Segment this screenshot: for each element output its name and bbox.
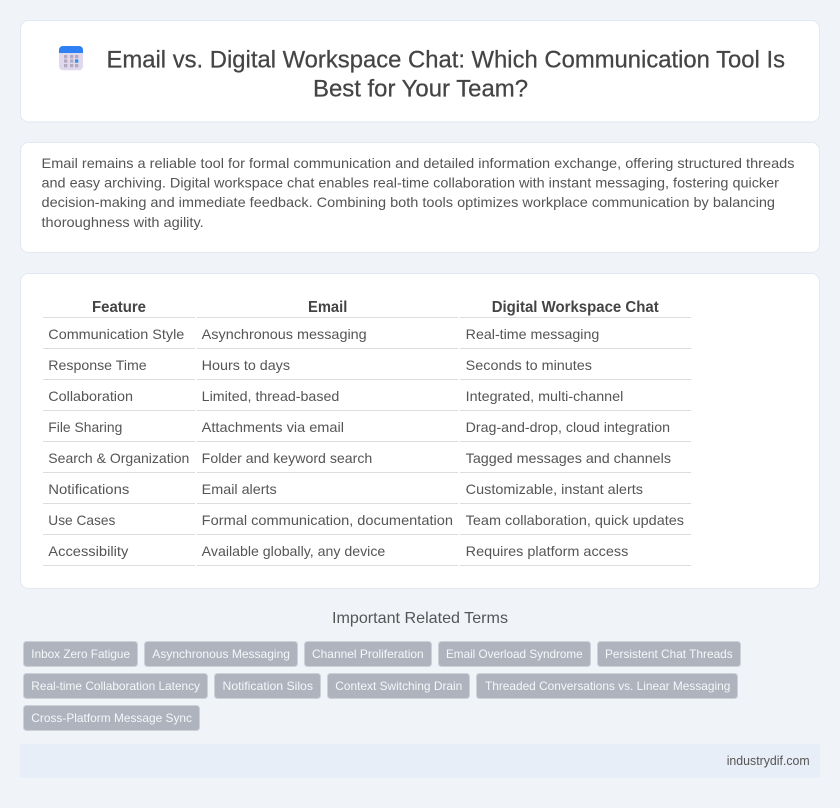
tag: real-time collaboration latency bbox=[24, 674, 208, 698]
text block: introduction paragraph: decision-making and immediate feedback. Combining both tools optimizes workplace communication by balancing bbox=[42, 194, 775, 210]
table row: response time bbox=[43, 357, 691, 380]
table row: file sharing: File Sharing bbox=[48, 419, 122, 435]
table row: search and organization bbox=[43, 450, 691, 473]
table row: use cases: Formal communication, documentation bbox=[202, 512, 453, 528]
table header row bbox=[43, 299, 691, 318]
tag: cross-platform message sync: Cross-Platform Message Sync bbox=[31, 711, 192, 725]
table row: communication style: Real-time messaging bbox=[466, 326, 599, 342]
table row: accessibility: Accessibility bbox=[48, 543, 128, 559]
heading: important related terms: Important Related Terms bbox=[332, 610, 508, 627]
table row: use cases bbox=[43, 512, 691, 535]
table row: communication style: Asynchronous messaging bbox=[202, 326, 367, 342]
table row: use cases: Use Cases bbox=[48, 512, 115, 528]
table row: response time: Seconds to minutes bbox=[466, 357, 592, 373]
tag: cross-platform message sync bbox=[24, 706, 200, 730]
table row: communication style bbox=[43, 326, 691, 349]
tag: asynchronous messaging: Asynchronous Messaging bbox=[152, 647, 290, 661]
tag: threaded conversations vs linear messaging bbox=[476, 674, 738, 698]
tag: channel proliferation bbox=[304, 642, 432, 666]
table row: accessibility bbox=[43, 543, 691, 566]
text block: introduction paragraph bbox=[42, 155, 794, 230]
tag: notification silos bbox=[214, 674, 320, 698]
tag: inbox zero fatigue bbox=[24, 642, 138, 666]
tag: real-time collaboration latency: Real-time Collaboration Latency bbox=[31, 679, 200, 693]
tag list: related terms bbox=[24, 642, 740, 730]
panel: introduction bbox=[20, 142, 820, 252]
table row: file sharing bbox=[43, 419, 691, 442]
tag: email overload syndrome: Email Overload Syndrome bbox=[446, 647, 583, 661]
table row: accessibility: Available globally, any device bbox=[202, 543, 386, 559]
table row: notifications bbox=[43, 481, 691, 504]
table row: search and organization: Tagged messages and channels bbox=[466, 450, 671, 466]
table header row: Email bbox=[308, 299, 347, 316]
table row: collaboration: Limited, thread-based bbox=[202, 388, 339, 404]
table header row: Digital Workspace Chat bbox=[492, 299, 659, 316]
title bbox=[106, 46, 785, 102]
tag: channel proliferation: Channel Proliferation bbox=[312, 647, 424, 661]
table row: collaboration bbox=[43, 388, 691, 411]
table row: communication style: Communication Style bbox=[48, 326, 185, 342]
tag: notification silos: Notification Silos bbox=[222, 679, 313, 693]
title: Best for Your Team? bbox=[313, 76, 528, 102]
table row: response time: Response Time bbox=[48, 357, 147, 373]
table row: file sharing: Attachments via email bbox=[202, 419, 344, 435]
table row: collaboration: Integrated, multi-channel bbox=[466, 388, 623, 404]
tag: inbox zero fatigue: Inbox Zero Fatigue bbox=[31, 647, 130, 661]
tag: email overload syndrome bbox=[438, 642, 590, 666]
tag: persistent chat threads bbox=[598, 642, 740, 666]
table row: accessibility: Requires platform access bbox=[466, 543, 628, 559]
tag: context switching drain bbox=[328, 674, 470, 698]
text block: introduction paragraph: and easy archiving. Digital workspace chat enables real-time collaboration with instant messaging, fostering quicker bbox=[42, 175, 779, 191]
tag: asynchronous messaging bbox=[144, 642, 298, 666]
table row: search and organization: Search & Organization bbox=[48, 450, 189, 466]
footer bar bbox=[20, 744, 820, 778]
table row: search and organization: Folder and keyword search bbox=[202, 450, 372, 466]
table row: notifications: Email alerts bbox=[202, 481, 277, 497]
footer source text: industrydif.com bbox=[727, 753, 810, 768]
tag: persistent chat threads: Persistent Chat Threads bbox=[605, 647, 733, 661]
table row: response time: Hours to days bbox=[202, 357, 290, 373]
icon: calendar grid bbox=[59, 46, 83, 70]
panel: comparison table bbox=[20, 274, 820, 588]
text block: introduction paragraph: Email remains a reliable tool for formal communication and detailed information exchange, offering structured threads bbox=[42, 155, 794, 171]
table row: notifications: Customizable, instant alerts bbox=[466, 481, 643, 497]
panel: title header bbox=[20, 20, 820, 122]
title: Email vs. Digital Workspace Chat: Which Communication Tool Is bbox=[106, 46, 785, 74]
table row: use cases: Team collaboration, quick updates bbox=[466, 512, 684, 528]
tag: context switching drain: Context Switching Drain bbox=[335, 679, 462, 693]
table row: notifications: Notifications bbox=[48, 481, 129, 497]
table row: file sharing: Drag-and-drop, cloud integration bbox=[466, 419, 670, 435]
table row: collaboration: Collaboration bbox=[48, 388, 133, 404]
text block: introduction paragraph: thoroughness with agility. bbox=[42, 214, 204, 230]
tag: threaded conversations vs linear messaging: Threaded Conversations vs. Linear Messaging bbox=[485, 679, 730, 693]
table header row: Feature bbox=[92, 299, 146, 316]
